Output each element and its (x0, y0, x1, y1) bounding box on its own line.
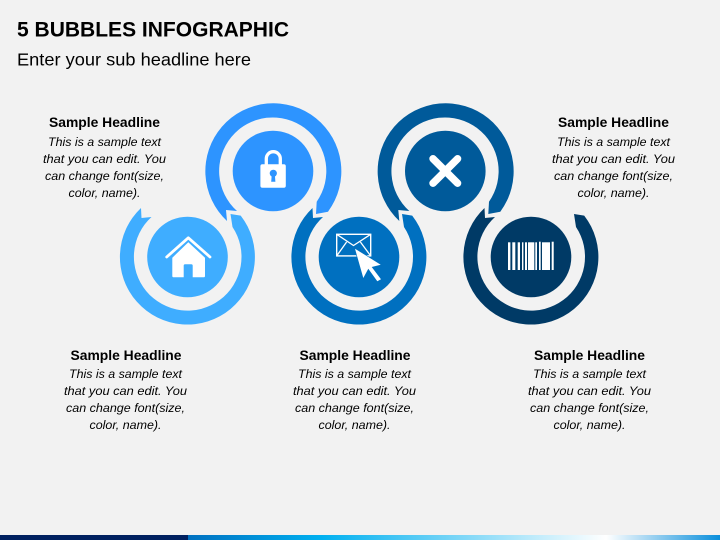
text block: top left: This is a sample text (48, 135, 162, 149)
bubble 4: close (378, 103, 514, 221)
text block: bottom center: can change font(size, (295, 401, 414, 415)
text block: top right: can change font(size, (554, 169, 673, 183)
text block: bottom right: Sample Headline (534, 348, 645, 363)
ring 1 (120, 208, 255, 325)
text block: bottom left: color, name). (90, 418, 162, 432)
text block: bottom right: can change font(size, (530, 401, 649, 415)
disc 2 (233, 131, 313, 211)
text block: top left: color, name). (68, 186, 140, 200)
text block: top left: that you can edit. You (43, 152, 166, 166)
text block: top right: Sample Headline (558, 115, 669, 130)
text block: top right (552, 115, 675, 200)
icon: barcode (508, 242, 554, 270)
footer bar (0, 535, 720, 540)
text block: bottom center: color, name). (318, 418, 390, 432)
bubble 5: barcode (463, 208, 598, 325)
text block: bottom right: that you can edit. You (528, 384, 651, 398)
text block: bottom left: can change font(size, (66, 401, 185, 415)
bubble 2: lock (205, 103, 341, 221)
bubble 3: mail (291, 208, 426, 325)
text block: top left: Sample Headline (49, 115, 160, 130)
ring 5 (463, 208, 598, 325)
text block: top left (43, 115, 166, 200)
text block: top left: can change font(size, (45, 169, 164, 183)
text block: bottom center: that you can edit. You (293, 384, 416, 398)
text block: bottom center: This is a sample text (298, 367, 412, 381)
text block: top right: color, name). (578, 186, 650, 200)
icon: home (167, 238, 210, 277)
ring 3 (291, 208, 426, 325)
text block: bottom right (528, 348, 651, 432)
text block: bottom left: Sample Headline (70, 348, 182, 363)
text block: bottom left (64, 348, 187, 432)
text block: top right: This is a sample text (557, 135, 671, 149)
subtitle: Enter your sub headline here (17, 50, 251, 70)
title: 5 BUBBLES INFOGRAPHIC (17, 18, 289, 41)
icon: padlock (260, 152, 286, 188)
text block: bottom center (293, 348, 416, 432)
text block: bottom right: color, name). (554, 418, 626, 432)
bubble 1: home (120, 208, 255, 325)
disc 4 (405, 131, 486, 211)
text block: bottom left: This is a sample text (69, 367, 183, 381)
ring 4 (378, 103, 514, 221)
disc 5 (491, 217, 571, 297)
text block: bottom right: This is a sample text (533, 367, 647, 381)
icon: x mark (433, 159, 458, 183)
ring 2 (205, 103, 341, 221)
disc 3 (319, 217, 399, 297)
icon: envelope with cursor (337, 234, 381, 281)
text block: bottom center: Sample Headline (300, 348, 411, 363)
disc 1 (147, 217, 228, 297)
text block: top right: that you can edit. You (552, 152, 675, 166)
text block: bottom left: that you can edit. You (64, 384, 187, 398)
